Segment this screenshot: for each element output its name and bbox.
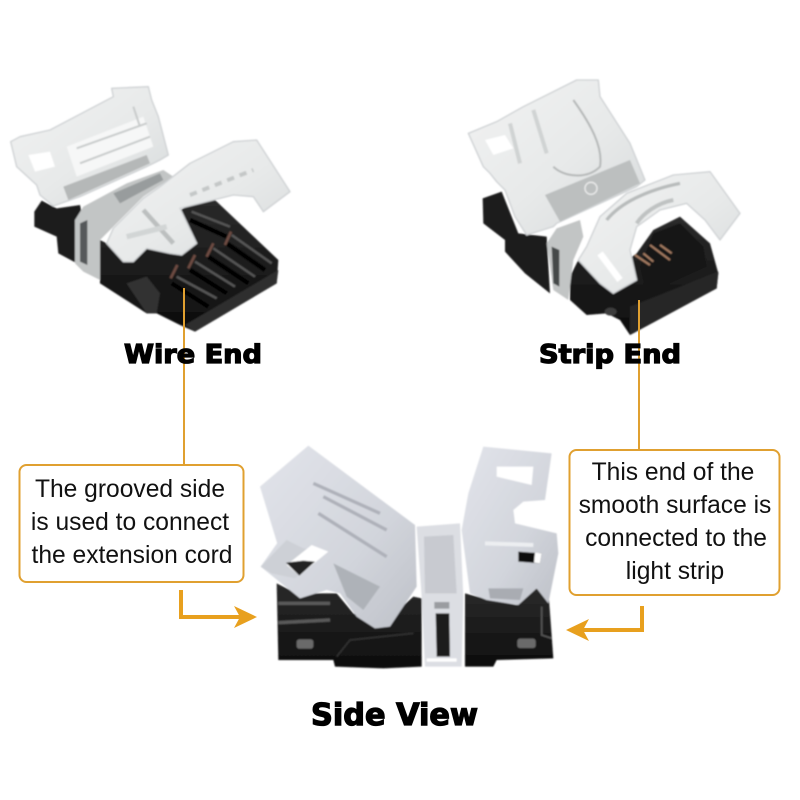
callout: grooved side <box>20 465 244 582</box>
front black housing with pins <box>570 217 718 335</box>
metal centre band <box>75 170 173 280</box>
callout: smooth surface <box>570 450 780 595</box>
right black housing <box>465 588 553 667</box>
connector photo: strip end <box>468 80 740 335</box>
callout: grooved side: the extension cord <box>32 542 232 569</box>
rear black housing <box>34 201 83 265</box>
callout: smooth surface: This end of the <box>592 459 754 486</box>
front black housing with grooves <box>100 198 278 332</box>
left clear cap with window <box>260 446 417 628</box>
callout: smooth surface: connected to the <box>585 525 767 552</box>
clear cap, front arch <box>578 172 740 293</box>
left black housing <box>277 583 422 668</box>
connector photo: wire end <box>11 87 290 332</box>
leader line: strip end <box>638 300 640 450</box>
arrow: left callout to side view <box>181 590 257 628</box>
connector photo: side view <box>260 446 558 668</box>
clear cap, raised <box>468 80 645 235</box>
metal centre band <box>547 220 583 300</box>
heading: side view: Side View <box>311 698 478 733</box>
arrow: right callout to side view <box>566 606 642 641</box>
clear cap, raised <box>11 87 168 206</box>
callout: grooved side: is used to connect <box>31 509 229 536</box>
callout: grooved side: The grooved side <box>35 476 225 503</box>
right clear cap with windows <box>462 447 558 605</box>
rear black housing <box>483 192 550 293</box>
leader line: wire end <box>183 288 185 465</box>
callout: smooth surface: light strip <box>626 558 724 585</box>
heading: strip end: Strip End <box>539 340 681 370</box>
heading: wire end: Wire End <box>124 340 262 370</box>
callout: smooth surface: smooth surface is <box>579 492 771 519</box>
clear centre clip <box>417 523 463 667</box>
clear cap, front <box>107 140 290 262</box>
